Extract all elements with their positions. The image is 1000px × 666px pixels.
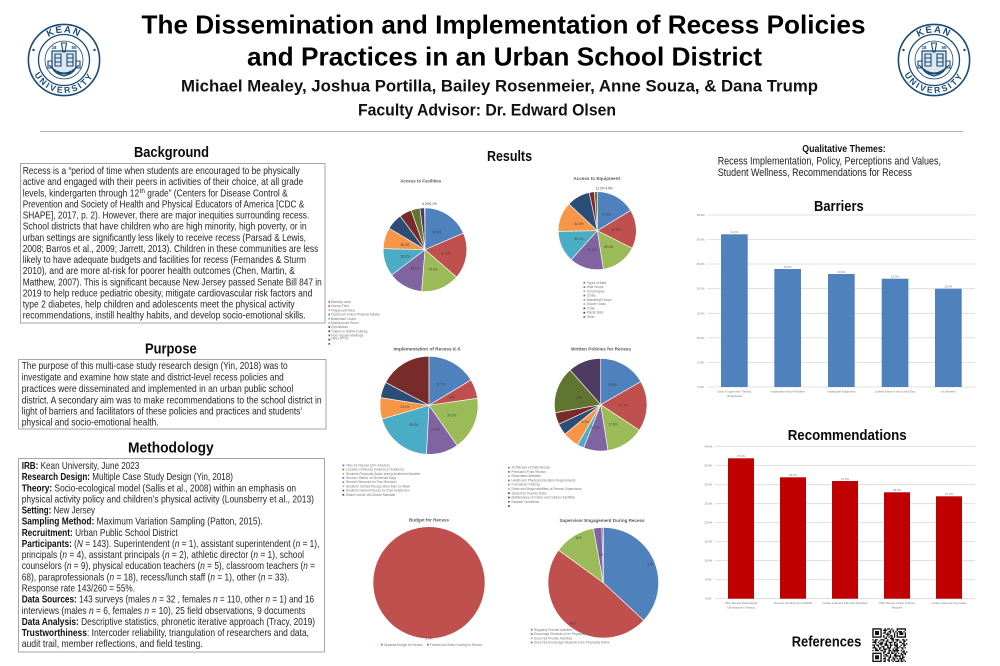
panel: background text: SHAPE], 2017, p. 2). However, there are major inequities surrounding recess. [23, 210, 309, 222]
legend: Written Policies for Recess: Student to Teacher Ratio [512, 491, 547, 495]
chart: Barriers bar chart: Inadequate Indoor Facilities [771, 390, 805, 394]
chart: Barriers bar chart: Lack of Supervisor Training [717, 390, 752, 394]
chart: Barriers bar chart: Inadequate Equipment [827, 390, 856, 394]
logo: Kean University seal, right: UNIVERSITY [905, 72, 962, 94]
chart: Access to Equipment pie: Access to Equipment [573, 176, 621, 181]
panel: methodology text: IRB: Kean University, June 2023 [22, 461, 140, 472]
chart: Barriers bar chart: 20.0% [944, 284, 953, 288]
chart: Access to Facilities pie: 6.2%0.1% [422, 202, 437, 206]
text: qualitative themes: Recess Implementation, Policy, Perceptions and Values, [718, 155, 941, 167]
chart: Written Policies for Recess pie: 11.3% [591, 426, 600, 430]
legend: Access to Equipment: Soccer Goals [587, 302, 606, 306]
legend: Written Policies for Recess: Precluded From Recess [512, 470, 546, 474]
panel: methodology text: Sampling Method: Maximum Variation Sampling (Patton, 2015). [22, 517, 263, 528]
chart: Access to Facilities pie: 75.0% [428, 268, 438, 272]
panel: purpose text: investigate and examine how state and district-level recess policies and [22, 373, 284, 384]
logo: Kean University seal, left: UNIVERSITY [35, 72, 92, 94]
panel: background text: levels, kindergarten through 12 [23, 188, 139, 199]
panel: methodology text: Theory: Socio-ecological model (Sallis et al., 2008) within an emphasis on [22, 483, 296, 494]
chart: Barriers bar chart: 35.0% [697, 213, 705, 217]
chart: Recommendations bar chart: Modules [892, 606, 903, 610]
panel: methodology text: 68), paraprofessionals (n = 18), recess/lunch staff (n = 1), other (n = 33). [22, 572, 289, 583]
chart: Access to Equipment pie: 52.0% [574, 222, 584, 226]
chart: Written Policies for Recess pie: 6.4% [582, 420, 589, 424]
legend: Supervisor Engagement During Recess: Does Not Provide Activities [534, 636, 573, 640]
icon: QR code [872, 628, 907, 662]
chart: Barriers bar chart: 5.0% [698, 360, 704, 364]
panel: methodology text: principals (n = 4), assistant principals (n = 2), athletic director (n = 1), school [22, 550, 304, 561]
legend: Written Policies for Recess: Maintenance of Indoor and Outdoor Facilities [512, 496, 576, 500]
panel: purpose text: district. A secondary aim was to make recommendations to the school district in [22, 395, 322, 406]
chart: Supervisor Engagement During Recess pie: 3% [598, 553, 603, 557]
chart: Barriers bar chart: 10.0% [697, 336, 705, 340]
legend: Written Policies for Recess: Health and Physical Education Requirements [512, 478, 576, 482]
chart: Barriers bar chart: Limited Hours in the School Day [875, 390, 916, 394]
chart: Budget for Recess pie [373, 518, 485, 647]
text: qualitative themes: Student Wellness, Recommendations for Recess [718, 167, 912, 179]
chart: Recommendations bar chart: 40.0% [704, 444, 713, 448]
legend: Access to Facilities: Multipurpose Room [331, 321, 359, 325]
panel: methodology text [18, 458, 324, 652]
legend: Supervisor Engagement During Recess: Encourage Students to be Physically Active [534, 632, 596, 636]
legend: Access to Facilities: Other (PTO) [331, 337, 348, 341]
legend: Access to Facilities: Basketball Courts [331, 317, 356, 321]
heading: Barriers: Barriers [814, 198, 864, 215]
panel: purpose text: light of barriers and facilitators of these policies and practices and students’ [22, 407, 302, 418]
chart: Barriers bar chart: 0.0% [698, 385, 704, 389]
chart: Recommendations bar chart: Create a Recess Committee [931, 601, 967, 605]
chart: Barriers bar chart [697, 213, 975, 398]
chart: Recommendations bar chart: 31.0% [841, 477, 849, 481]
legend: Access to Facilities [328, 300, 380, 345]
chart: Implementation of Recess K-5 pie: 37.7% [436, 382, 445, 386]
chart: Written Policies for Recess pie: 22.8% [608, 383, 617, 387]
panel: background text: 2008; Barros et al., 2009; Jarrett, 2013). Children in these communities are less [23, 244, 318, 255]
chart: Barriers bar chart: 23.0% [837, 270, 846, 274]
legend: Implementation of Recess K-5: Recess Offered on Shortened Days [346, 476, 397, 480]
chart: Supervisor Engagement During Recess pie: 48% [570, 622, 576, 626]
title: The Dissemination and Implementation of Recess Policies [142, 10, 866, 40]
chart: Barriers bar chart: (Scrapbook) [727, 394, 742, 398]
panel: purpose text: physical and socio-emotional health. [22, 418, 159, 429]
chart: Access to Facilities pie: 50.5% [401, 254, 410, 258]
panel: background text: School districts that have children who are high minority, high poverty, or in [23, 222, 307, 233]
chart: Recommendations bar chart: 15.0% [704, 540, 713, 544]
legend: Written Policies for Recess [508, 466, 582, 507]
legend: Written Policies for Recess: 20 Minutes of Daily Recess [512, 466, 551, 470]
authors: Michael Mealey, Joshua Portilla, Bailey Rosenmeier, Anne Souza, & Dana Trump [181, 78, 818, 96]
legend: Access to Facilities: Playground Area [331, 308, 355, 312]
legend: Access to Equipment: Basketball Hoops [587, 298, 612, 302]
panel: background text: 2010), and are more at-risk for poorer health outcomes (Chen, Martin, & [23, 266, 295, 277]
chart: Supervisor Engagement During Recess pie: Supervisor Engagement During Recess [560, 518, 645, 523]
panel: background text: grade” (Centers for Disease Control & [147, 188, 288, 199]
legend: Written Policies for Recess: Restorative Activities [512, 474, 541, 478]
heading: Results: Results [487, 148, 532, 165]
chart: Barriers bar chart: 31.0% [730, 230, 739, 234]
chart: Recommendations bar chart: 37.0% [737, 454, 745, 458]
panel: methodology text: Trustworthiness: Intercoder reliability, triangulation of researchers and data, [22, 628, 309, 639]
chart: Recommendations bar chart: Development Training [727, 606, 755, 610]
chart: Budget for Recess pie: Separate Budget for Recess [384, 643, 423, 647]
legend: Implementation of Recess K-5: District meets 150 Minute Mandate [346, 493, 395, 497]
panel: background text: active and engaged with their peers in activities of their choice, at all grade [23, 177, 304, 188]
heading: Background: Background [134, 144, 209, 161]
panel: background text: likely to have adequate budgets and facilities for recess (Fernandes & Sturm [23, 255, 306, 266]
chart: Supervisor Engagement During Recess pie [558, 518, 654, 626]
chart: Recommendations bar chart: 30.0% [704, 483, 713, 487]
panel: background text: urban settings are significantly less likely to receive recess (Parsad & Lewis, [23, 233, 306, 244]
chart: Implementation of Recess K-5 pie: Implementation of Recess K-5 [394, 346, 461, 352]
chart: Recommendations bar chart: Receive Funding from NJDOE [774, 601, 812, 605]
chart: Written Policies for Recess pie: Written Policies for Recess [571, 346, 631, 352]
title: and Practices in an Urban School District [247, 42, 762, 72]
logo: Kean University seal, right: KEAN [916, 26, 950, 37]
chart: Recommendations bar chart: 5.0% [705, 578, 712, 582]
legend: Access to Equipment: Types of Balls [587, 281, 607, 285]
logo: Kean University seal, right: 18 [922, 45, 927, 50]
legend: Implementation of Recess K-5: Time for Recess (20+ minutes) [346, 463, 390, 467]
legend: Access to Facilities: Classroom Indoor Physical Activity [331, 313, 380, 317]
heading: Recommendations: Recommendations [788, 427, 907, 444]
legend: Implementation of Recess K-5: Location of Recess (Indoors & Outdoors) [346, 468, 404, 472]
chart: Recommendations bar chart: 28.0% [893, 488, 901, 492]
chart: Barriers bar chart: 24.0% [784, 265, 792, 269]
logo: Kean University seal, left: KEAN [46, 26, 80, 37]
legend: Written Policies for Recess: Formalized Training [512, 483, 540, 487]
legend: Access to Equipment: Hula Hoops [587, 285, 604, 289]
panel: methodology text: Setting: New Jersey [22, 506, 96, 516]
legend: Access to Equipment: Jump Ropes [587, 289, 605, 293]
panel: background text [20, 164, 325, 323]
chart: Implementation of Recess K-5 pie: 14% [449, 396, 455, 400]
chart: Access to Equipment pie: 69.8% [611, 228, 621, 232]
faculty advisor: Faculty Advisor: Dr. Edward Olsen [358, 102, 616, 120]
legend: Written Policies for Recess: Roles and Responsibilities of Recess Supervisors [512, 487, 582, 491]
chart: Recommendations bar chart: Create a Recess Plan and Schedule [822, 601, 868, 605]
panel: methodology text: physical activity policy and children’s physical activity (Lounsberry et al., 2013) [22, 494, 314, 505]
panel: background text: Recess is a “period of time when students are encouraged to be physically [23, 166, 300, 177]
heading: Purpose: Purpose [145, 340, 197, 358]
chart: Recommendations bar chart: 35.0% [704, 463, 713, 467]
panel: purpose text: The purpose of this multi-case study research design (Yin, 2018) was to [22, 361, 288, 372]
chart: Access to Equipment pie: 11.2% 4.9% [596, 186, 613, 190]
chart: Implementation of Recess K-5 pie: 16.1% [400, 405, 409, 409]
chart: Recommendations bar chart: 27.0% [945, 492, 953, 496]
chart: Recommendations bar chart: 32.0% [789, 473, 797, 477]
title [142, 10, 866, 72]
legend: Access to Facilities: Trailers or Mobile building [331, 329, 368, 333]
chart: Recommendations bar chart: Offer Recess Professional [725, 601, 758, 605]
logo: Kean University seal, left [28, 24, 100, 96]
chart: Barriers bar chart: 20.0% [697, 287, 705, 291]
logo: Kean University seal, left: 18 [52, 45, 57, 50]
heading: Methodology: Methodology [128, 440, 214, 457]
chart: Recommendations bar chart: 20.0% [704, 521, 713, 525]
legend: Access to Equipment: Chalk [587, 306, 595, 310]
legend: Implementation of Recess K-5: Recess Removed for Poor Behavior [346, 480, 398, 484]
chart: Supervisor Engagement During Recess pie: 11% [575, 536, 582, 540]
panel: methodology text: interviews (males n = 6, females n = 10), 25 field observations, 9 documents [22, 606, 305, 617]
legend: Implementation of Recess K-5 [342, 463, 421, 497]
legend: Supervisor Engagement During Recess: Regularly Provide Activities [534, 628, 573, 632]
panel: background text: recommendations, instill healthy habits, and develop socio-emotional skills. [23, 311, 306, 322]
legend: Implementation of Recess K-5: Students Denied Recess for Poor Academics [346, 489, 410, 493]
panel: methodology text: Response rate 143/260 = 55%. [22, 584, 135, 594]
chart: Barriers bar chart: 15.0% [697, 311, 705, 315]
chart: Budget for Recess pie: Federal and State Funding for Recess [430, 643, 482, 647]
chart: Written Policies for Recess pie: 17.0% [608, 422, 618, 426]
panel: methodology text: Data Analysis: Descriptive statistics, phronetic iterative approach (Tracy, 2019) [22, 617, 315, 628]
legend: Access to Equipment [584, 281, 612, 319]
legend: Supervisor Engagement During Recess [531, 628, 610, 645]
legend: Access to Facilities: Blacktop area [331, 300, 351, 304]
panel: methodology text: Data Sources: 143 surveys (males n = 32 , females n = 110, other n = 1) and 16 [22, 595, 314, 606]
legend: Access to Equipment: Plastic Bats [587, 311, 604, 315]
legend: Access to Facilities: Floor Square Markings [331, 334, 364, 338]
panel: methodology text: Research Design: Multiple Case Study Design (Yin, 2018) [22, 472, 233, 483]
chart: Access to Facilities pie: 30.8% [432, 230, 441, 234]
chart: Implementation of Recess K-5 pie [381, 346, 477, 454]
panel: purpose text [18, 360, 326, 429]
chart: Recommendations bar chart: 10.0% [704, 559, 713, 563]
panel: background text: 2019 to help reduce pediatric obesity, mitigate cardiovascular risk factors and [23, 288, 313, 299]
legend: Access to Equipment: Cones [587, 294, 596, 298]
panel: purpose text: practices were disseminated and implemented in an urban public school [22, 384, 293, 395]
legend: Access to Facilities: Grassy Field [331, 304, 349, 308]
chart: Access to Facilities pie: 31.2% [441, 252, 450, 256]
panel: background text: Matthew, 2007). This is significant because New Jersey passed Senate Bill 847 in [23, 277, 322, 288]
legend: Access to Facilities: Gymnasium [331, 325, 348, 329]
chart: Written Policies for Recess pie: 19% [576, 396, 582, 400]
logo: Kean University seal, left: 55 [72, 45, 77, 50]
chart: Access to Equipment pie: 72.3% [602, 212, 611, 216]
legend: Written Policies for Recess: Disaster Guidelines [512, 500, 540, 504]
legend: Supervisor Engagement During Recess: Does Not Encourage Students to be Physically Active [534, 641, 610, 645]
logo: Kean University seal, right [898, 24, 970, 96]
chart: Recommendations bar chart [704, 444, 975, 610]
panel: methodology text: audit trail, member reflections, and field testing. [22, 639, 203, 650]
panel: methodology text: Recruitment: Urban Public School District [22, 528, 178, 539]
chart: Barriers bar chart: 30.0% [697, 238, 705, 242]
chart: Barriers bar chart: 22.0% [891, 274, 899, 278]
chart: Access to Equipment pie: 60.3% [604, 245, 613, 249]
panel: background text: type 2 diabetes, help children and adolescents meet the physical activity [23, 300, 295, 311]
legend: Implementation of Recess K-5: Students Physically Active during Inclement Weather [346, 472, 421, 476]
chart: Written Policies for Recess pie: 21.7% [619, 404, 628, 408]
chart: Access to Facilities pie: 64.0% [411, 266, 420, 270]
chart: Implementation of Recess K-5 pie: 39.2% [447, 414, 456, 418]
legend: Implementation of Recess K-5: Students' Denied Recess More than 2x Week [346, 484, 411, 488]
chart: Budget for Recess pie: Budget for Recess [409, 518, 449, 522]
chart: Access to Equipment pie: 57.0% [587, 248, 597, 252]
chart: Recommendations bar chart: 25.0% [704, 502, 713, 506]
chart: Access to Equipment pie: 55.4% [574, 237, 584, 241]
text: qualitative themes: Qualitative Themes: [802, 144, 886, 155]
chart: Access to Facilities pie [383, 178, 464, 292]
chart: Budget for Recess pie: 0.0% [425, 636, 433, 640]
chart: Written Policies for Recess pie [555, 346, 641, 451]
chart: Barriers bar chart: No Barriers [941, 390, 956, 394]
logo: Kean University seal, right: 55 [942, 45, 947, 50]
chart: Access to Facilities pie: 36.3% [400, 243, 410, 247]
chart: Supervisor Engagement During Recess pie: 37% [648, 562, 654, 566]
chart: Access to Facilities pie: Access to Facilities [400, 178, 442, 184]
heading: References: References [792, 633, 861, 650]
panel: methodology text: counselors (n = 9), physical education teachers (n = 5), classroom teachers (n = [22, 561, 315, 572]
chart: Recommendations bar chart: Offer Recess Online Training [879, 601, 915, 605]
chart: Recommendations bar chart: 0.0% [705, 597, 712, 601]
panel: methodology text: Participants: (N = 143). Superintendent (n = 1), assistant superintendent (n = 1), [22, 539, 319, 550]
chart: Access to Equipment pie [558, 176, 632, 269]
chart: Barriers bar chart: 25.0% [697, 262, 705, 266]
text: qualitative themes [718, 144, 941, 179]
panel: background text: th [140, 188, 145, 195]
chart: Implementation of Recess K-5 pie: 23.9% [431, 428, 440, 432]
legend: Access to Equipment: Other [587, 315, 596, 319]
panel: background text: Prevention and Society of Health and Physical Educators of America [CDC & [23, 199, 304, 210]
chart: Implementation of Recess K-5 pie: 45.0% [409, 423, 418, 427]
